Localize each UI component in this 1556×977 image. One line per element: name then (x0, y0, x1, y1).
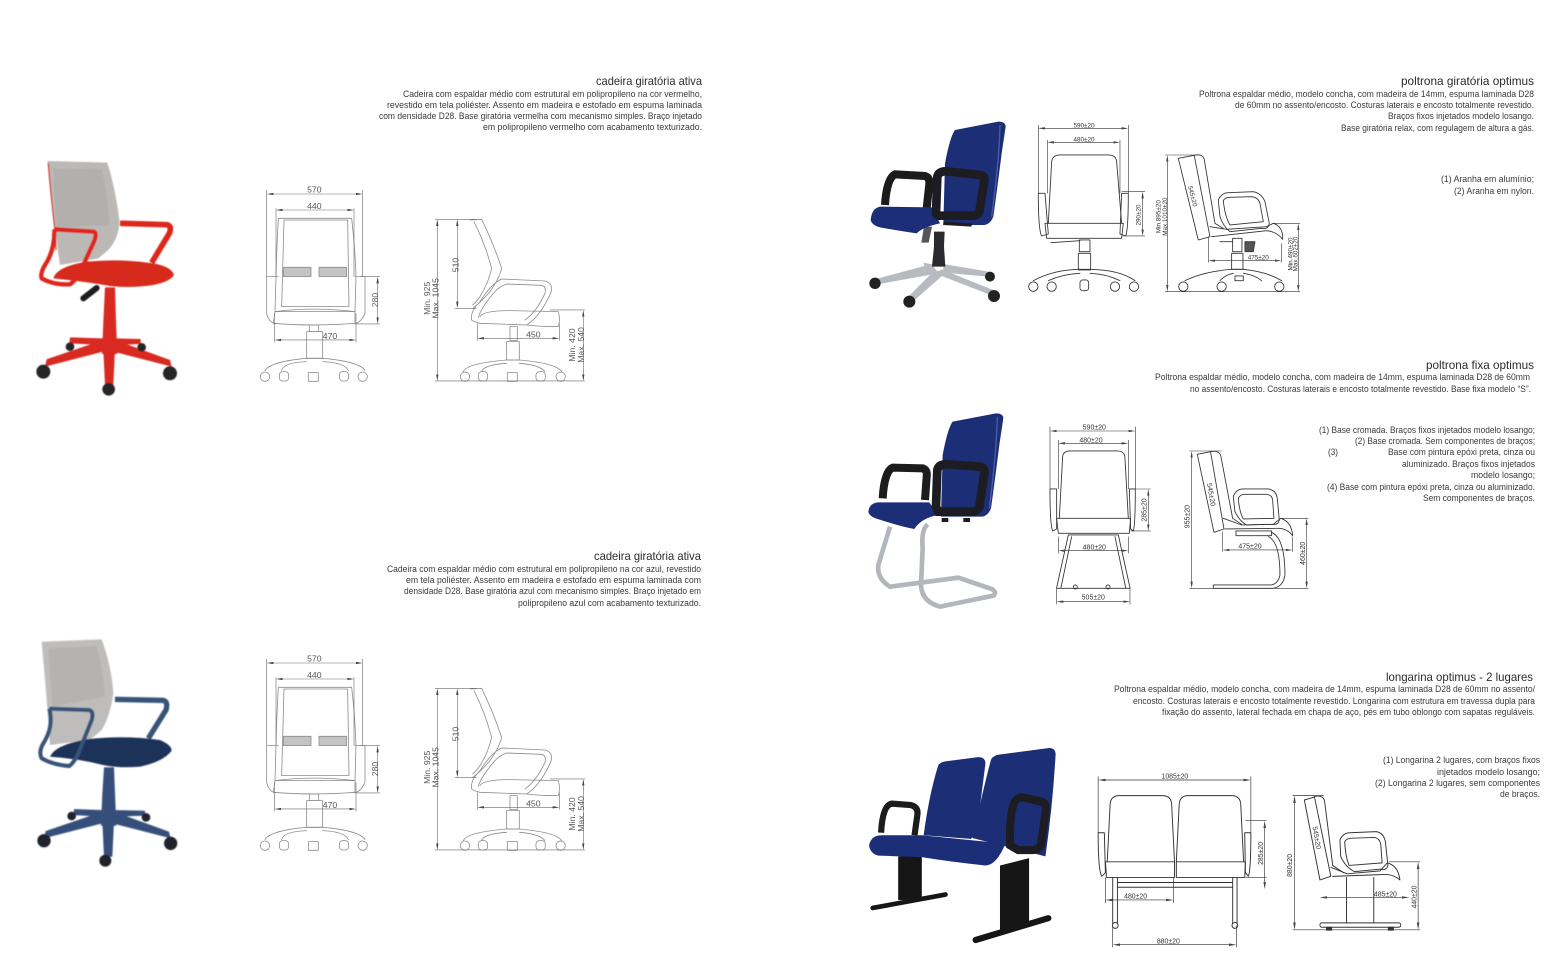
diagram: side view dimensions azul (422, 688, 586, 850)
text block: description optimus (1199, 89, 1534, 133)
heading: longarina optimus: longarina optimus - 2 lugares (1386, 670, 1533, 684)
diagram: front view dimensions azul: 280 (370, 762, 380, 776)
diagram: front view longarina: 1085±20 (1161, 774, 1188, 781)
text block: description: Cadeira com espaldar médio com estrutural em polipropileno na cor vermelho, (403, 89, 702, 99)
diagram: front view fixa: 505±20 (1082, 595, 1105, 602)
heading: cadeira giratoria ativa azul: cadeira giratória ativa (594, 549, 701, 563)
diagram: front view dimensions: 470 (323, 331, 337, 341)
text block: description: em polipropileno vermelho com acabamento texturizado. (483, 122, 702, 132)
diagram: front view optimus: 590±20 (1073, 122, 1095, 129)
heading: poltrona fixa optimus: poltrona fixa optimus (1426, 358, 1534, 372)
text block: options longarina: injetados modelo losango; (1437, 767, 1540, 777)
diagram: side view fixa: 955±20 (1184, 505, 1191, 528)
text block: description azul: densidade D28. Base giratória azul com mecanismo simples. Braço injetado em (404, 586, 701, 596)
diagram: front view dimensions azul (260, 654, 380, 850)
text block: description optimus: de 60mm no assento/encosto. Costuras laterais e encosto totalmente revestido. (1235, 100, 1534, 110)
diagram: side view optimus: 545±20 (1186, 185, 1198, 208)
text block: description longarina: fixação do assento, lateral fechada em chapa de aço, pés em tubo oblongo com sapatas reguláveis. (1162, 707, 1535, 717)
diagram: front view dimensions (260, 185, 380, 381)
diagram: side view longarina (1287, 796, 1420, 930)
diagram: front view fixa: 285±20 (1142, 498, 1149, 522)
diagram: side view fixa: 460±20 (1300, 542, 1307, 565)
diagram: front view fixa: 480±20 (1083, 544, 1106, 551)
text block: options longarina: de braços. (1500, 789, 1540, 799)
text block: description fixa: Poltrona espaldar médio, modelo concha, com madeira de 14mm, espuma laminada D28 de 60mm (1155, 372, 1530, 382)
photo: blue swivel armchair (869, 122, 1006, 308)
heading: cadeira giratoria ativa: cadeira giratória ativa (596, 74, 702, 88)
panel: cadeira giratoria ativa vermelha (36, 74, 702, 396)
text block: description azul (387, 564, 701, 608)
diagram: side view dimensions azul: Min. 925 (422, 751, 432, 784)
diagram: side view longarina: 485±20 (1374, 891, 1397, 898)
diagram: side view optimus (1156, 155, 1300, 292)
photo: blue fixed armchair (868, 413, 1003, 607)
panel: poltrona fixa optimus (868, 358, 1535, 607)
text block: description optimus: Base giratória relax, com regulagem de altura a gás. (1341, 123, 1534, 133)
heading: poltrona giratoria optimus: poltrona giratória optimus (1401, 74, 1534, 88)
diagram: side view longarina: 880±20 (1287, 854, 1294, 877)
text block: description optimus: Poltrona espaldar médio, modelo concha, com madeira de 14mm, espuma laminada D28 (1199, 89, 1534, 99)
diagram: front view dimensions azul: 570 (307, 654, 322, 664)
text block: description azul: Cadeira com espaldar médio com estrutural em polipropileno na cor azul, revestido (387, 564, 701, 574)
text block: options fixa (1319, 425, 1535, 503)
text block: description: revestido em tela poliéster. Assento em madeira e estofado em espuma laminada (387, 100, 702, 110)
text block: description longarina: encosto. Costuras laterais e encosto totalmente revestido. Longarina com estrutura em travessa dupla para (1133, 696, 1535, 706)
diagram: side view dimensions azul: 510 (450, 727, 460, 741)
diagram: side view dimensions azul: 450 (526, 798, 541, 808)
text block: description fixa: no assento/encosto. Costuras laterais e encosto totalmente revestido. Base fixa modelo “S”. (1190, 384, 1531, 394)
photo: blue two seat bench (869, 748, 1056, 940)
diagram: front view dimensions azul: 440 (307, 670, 322, 680)
diagram: side view optimus: Max.1010±20 (1162, 197, 1169, 236)
diagram: side view dimensions (422, 219, 586, 381)
diagram: side view optimus: Max.602±20 (1292, 236, 1299, 271)
diagram: side view dimensions azul: Max. 540 (576, 796, 586, 832)
text block: description optimus: Braços fixos injetados modelo losango. (1388, 111, 1534, 121)
diagram: front view dimensions azul: 470 (323, 800, 337, 810)
diagram: front view optimus: 480±20 (1073, 136, 1095, 143)
diagram: side view dimensions: Min. 925 (422, 282, 432, 315)
text block: options longarina: (1) Longarina 2 lugares, com braços fixos (1383, 755, 1540, 765)
text block: options fixa: Base com pintura epóxi preta, cinza ou (1388, 447, 1535, 457)
diagram: front view dimensions: 440 (307, 201, 322, 211)
text block: description (379, 89, 702, 132)
text block: options fixa: Sem componentes de braços. (1423, 493, 1535, 503)
photo: blue mesh office chair (37, 639, 177, 867)
diagram: side view optimus: Min.895±20 (1156, 200, 1163, 233)
photo: red mesh office chair (36, 161, 177, 396)
diagram: front view optimus: 290±20 (1136, 204, 1143, 226)
text block: description azul: em tela poliéster. Assento em madeira e estofado em espuma laminada com (406, 575, 701, 585)
text block: options fixa: (3) (1328, 447, 1338, 457)
diagram: side view dimensions azul: Min. 420 (567, 797, 577, 831)
diagram: side view dimensions: 450 (526, 329, 541, 339)
diagram: front view longarina (1098, 774, 1267, 947)
text block: options: (1) Aranha em alumínio; (1441, 174, 1534, 184)
diagram: front view fixa: 590±20 (1083, 425, 1106, 432)
diagram: side view fixa (1184, 451, 1308, 588)
diagram: front view dimensions: 570 (307, 185, 322, 195)
panel: longarina optimus 2 lugares (869, 670, 1540, 947)
text block: options: (2) Aranha em nylon. (1454, 186, 1534, 196)
text block: options fixa: (4) Base com pintura epóxi preta, cinza ou aluminizado. (1327, 482, 1535, 492)
text block: description longarina: Poltrona espaldar médio, modelo concha, com madeira de 14mm, espuma laminada D28 de 60mm no assento/ (1114, 684, 1535, 694)
text block: description fixa (1155, 372, 1531, 394)
text block: options fixa: (1) Base cromada. Braços fixos injetados modelo losango; (1319, 425, 1535, 435)
text block: options longarina (1375, 755, 1540, 799)
diagram: front view optimus (1029, 122, 1145, 291)
text block: description longarina (1114, 684, 1535, 717)
text block: options longarina: (2) Longarina 2 lugares, sem componentes (1375, 778, 1540, 788)
diagram: front view fixa: 480±20 (1079, 437, 1103, 444)
diagram: side view fixa: 475±20 (1238, 544, 1262, 551)
diagram: front view longarina: 285±20 (1258, 842, 1265, 865)
text block: options fixa: (2) Base cromada. Sem componentes de braços; (1355, 436, 1535, 446)
diagram: side view dimensions: Min. 420 (567, 328, 577, 362)
diagram: side view dimensions: Max. 540 (576, 327, 586, 363)
panel: cadeira giratoria ativa azul (37, 549, 701, 867)
diagram: side view dimensions: Max. 1045 (430, 278, 440, 319)
diagram: front view fixa (1050, 425, 1151, 604)
text block: options fixa: modelo losango; (1471, 470, 1535, 480)
diagram: side view dimensions: 510 (450, 258, 460, 272)
diagram: side view dimensions azul: Max. 1045 (430, 747, 440, 788)
diagram: side view longarina: 545±20 (1311, 826, 1321, 850)
text block: options fixa: aluminizado. Braços fixos injetados (1402, 459, 1535, 469)
diagram: side view fixa: 545±20 (1205, 483, 1216, 507)
diagram: side view longarina: 440±20 (1411, 885, 1418, 909)
text block: description: com densidade D28. Base giratória vermelha com mecanismo simples. Braço injetado (379, 111, 702, 121)
diagram: side view optimus: Min.490±20 (1287, 237, 1294, 271)
diagram: front view dimensions: 280 (370, 293, 380, 307)
text block: options (1441, 174, 1534, 196)
diagram: front view longarina: 880±20 (1157, 938, 1180, 945)
text block: description azul: polipropileno azul com acabamento texturizado. (518, 598, 701, 608)
diagram: front view longarina: 480±20 (1124, 894, 1147, 901)
diagram: side view optimus: 475±20 (1248, 255, 1269, 262)
panel: poltrona giratoria optimus (869, 74, 1534, 308)
